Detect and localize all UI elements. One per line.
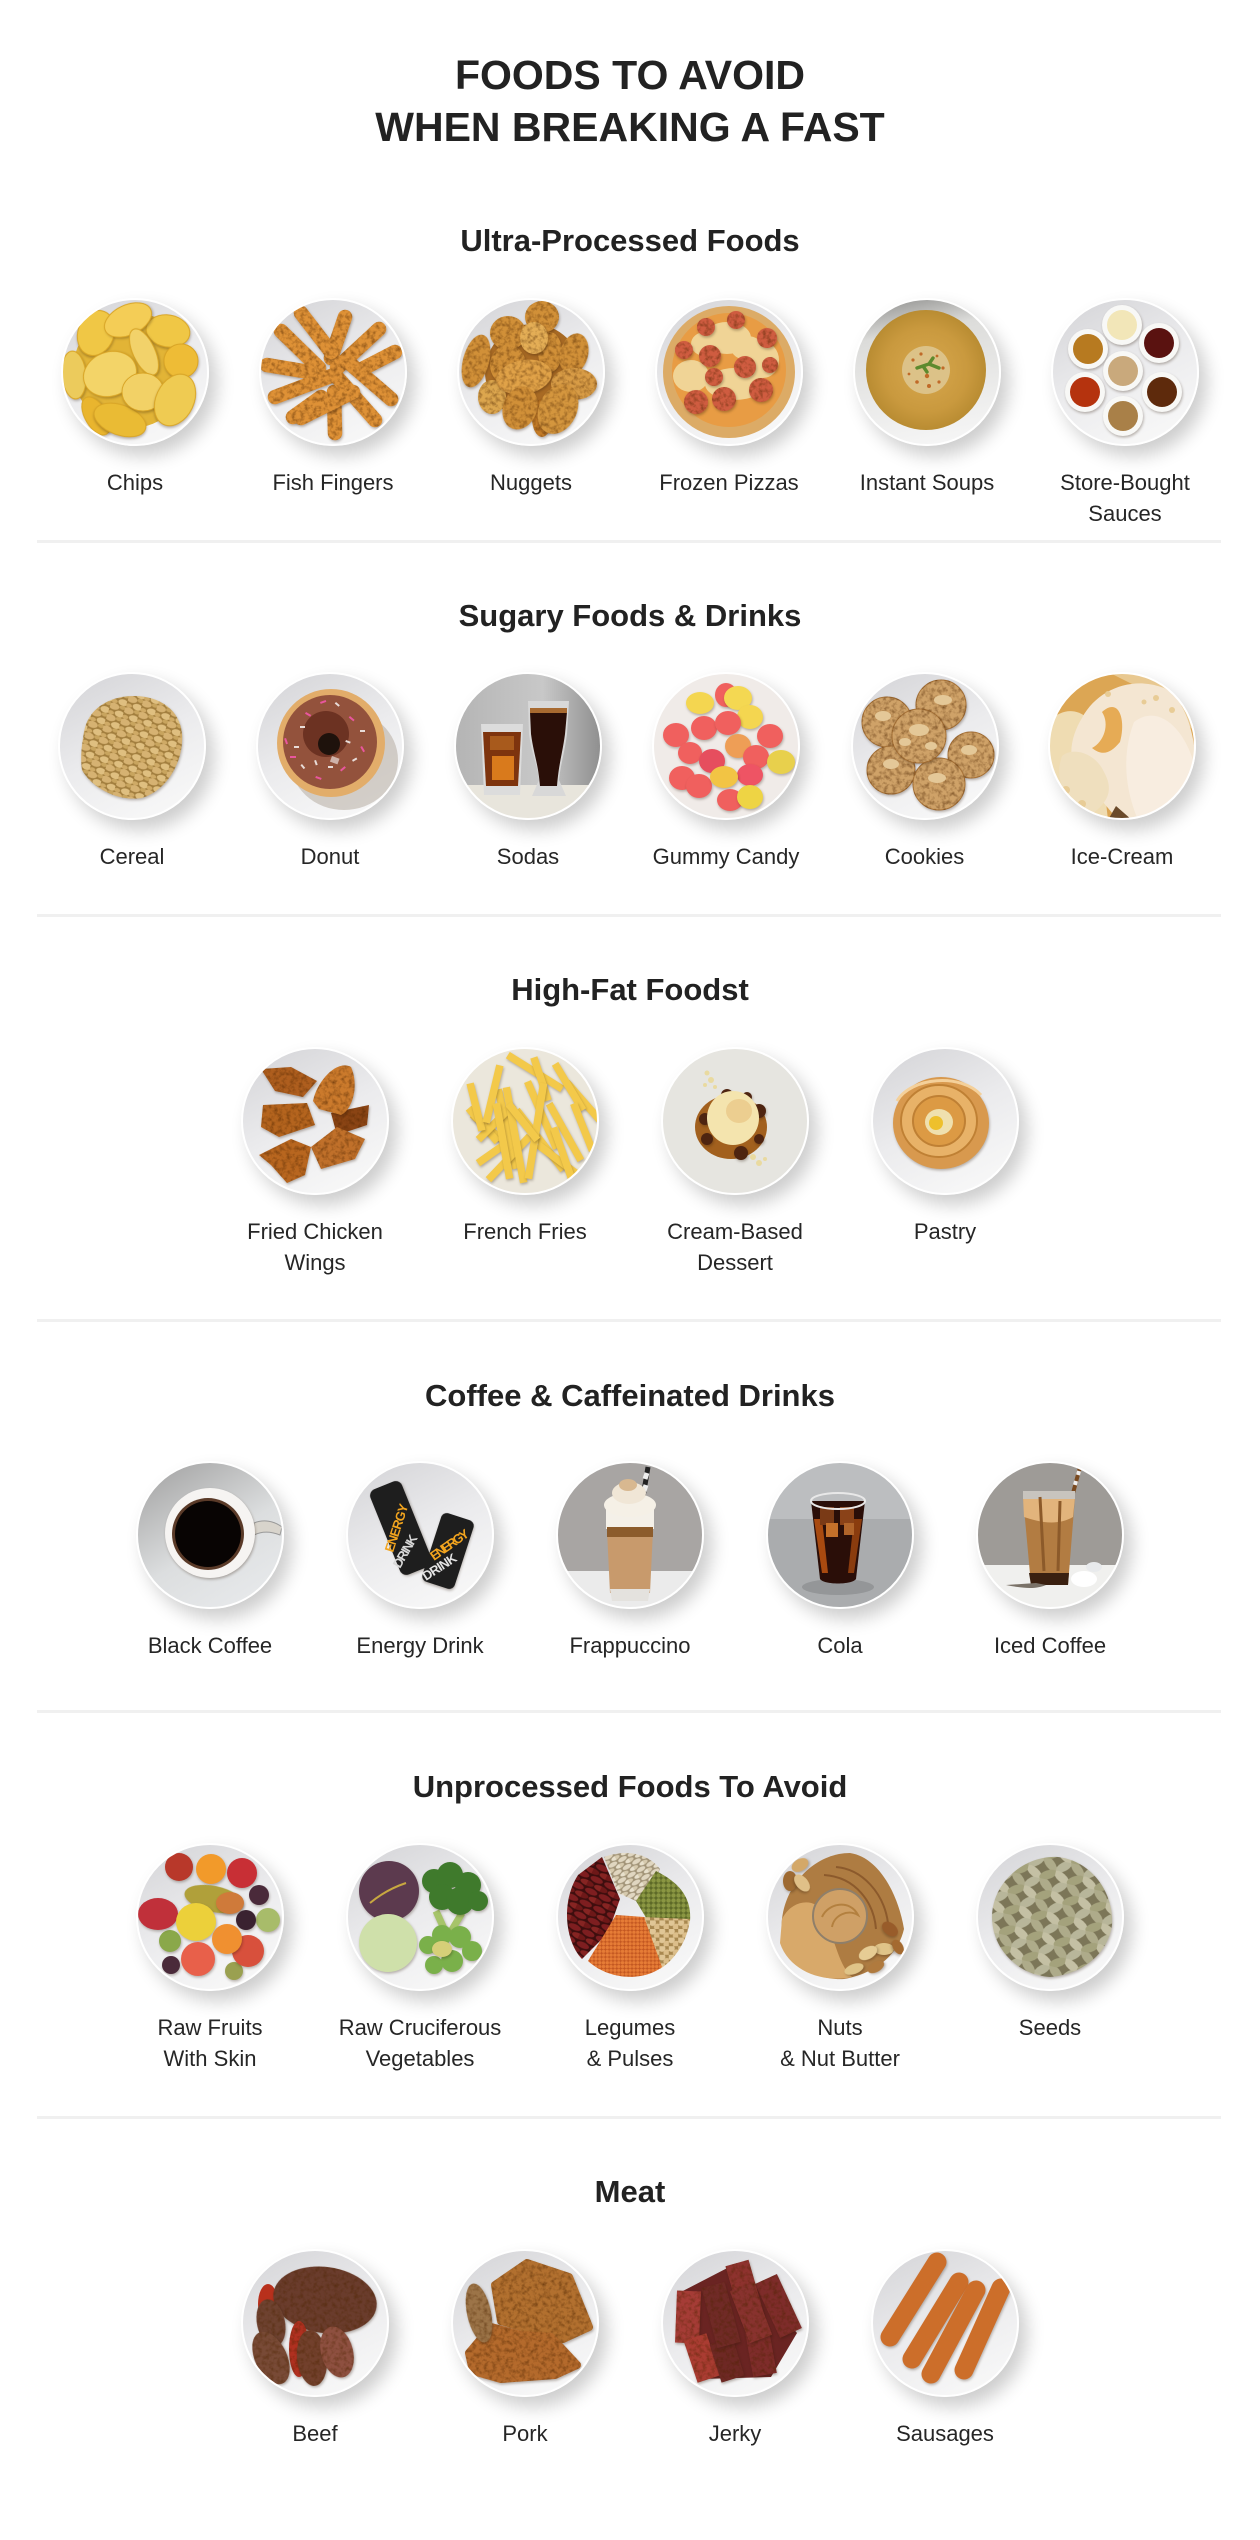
icon: pizza on a plate — [655, 298, 803, 446]
label: Wings — [284, 1250, 346, 1275]
item: frappuccino — [556, 1463, 720, 1658]
label — [780, 2015, 900, 2071]
icon: nuggets on a plate — [457, 298, 605, 446]
label — [247, 1219, 383, 1275]
icon: cream dessert on a plate — [661, 1047, 809, 1195]
label: Nuggets — [490, 470, 572, 494]
icon: sausages on a plate — [871, 2249, 1019, 2397]
item: black coffee — [136, 1463, 300, 1658]
label — [1060, 470, 1190, 526]
item: iced coffee — [976, 1463, 1140, 1658]
label: Cereal — [100, 844, 164, 869]
label: & Nut Butter — [780, 2046, 900, 2071]
label: Sodas — [497, 844, 559, 869]
icon: cereal on a plate — [58, 672, 206, 820]
item: french fries — [451, 1049, 615, 1244]
icon: two energy drink cans: DRINK — [419, 1550, 460, 1584]
item: donut — [256, 674, 420, 869]
label: Vegetables — [366, 2046, 474, 2071]
panel: meat — [241, 2174, 1035, 2446]
icon: cruciferous vegetables on a plate — [346, 1843, 494, 1991]
icon: frappuccino in a glass — [556, 1461, 704, 1609]
item: jerky — [661, 2251, 825, 2446]
icon: glass of cola — [766, 1461, 914, 1609]
icon: pastry on a plate — [871, 1047, 1019, 1195]
label: Black Coffee — [148, 1633, 272, 1658]
label: Chips — [107, 470, 163, 494]
label: Fried Chicken — [247, 1219, 383, 1244]
item: cookies — [851, 674, 1015, 869]
label: French Fries — [463, 1219, 587, 1244]
item: cereal — [58, 674, 222, 869]
label: Cream-Based — [667, 1219, 803, 1244]
heading: coffee and caffeinated drinks: Coffee & Caffeinated Drinks — [425, 1378, 835, 1412]
icon: two energy drink cans: ENERGY — [382, 1501, 411, 1554]
label: Seeds — [1019, 2015, 1081, 2040]
item: nuggets — [457, 300, 621, 494]
icon: fruits on a plate — [136, 1843, 284, 1991]
item: pastry — [871, 1049, 1035, 1244]
label: Frappuccino — [569, 1633, 691, 1658]
heading: sugary foods and drinks: Sugary Foods & Drinks — [459, 598, 801, 633]
label: Raw Fruits — [157, 2015, 263, 2040]
label: Iced Coffee — [994, 1633, 1106, 1658]
label: Dessert — [697, 1250, 773, 1275]
label: Cola — [817, 1633, 863, 1658]
icon: gummy candy on a plate — [652, 672, 800, 820]
icon: french fries on a plate — [451, 1047, 599, 1195]
label: With Skin — [164, 2046, 256, 2071]
icon: two energy drink cans: ENERGY — [427, 1526, 472, 1563]
title — [375, 52, 885, 150]
icon: nut butter and nuts on a plate — [766, 1843, 914, 1991]
item: raw fruits with skin — [136, 1845, 300, 2071]
label: Sauces — [1088, 500, 1162, 526]
icon: ice-cream close-up — [1048, 672, 1196, 820]
item: seeds — [976, 1845, 1140, 2040]
heading: high-fat foods: High-Fat Foodst — [511, 972, 749, 1007]
item: sausages — [871, 2251, 1035, 2446]
icon: cup of black coffee — [136, 1461, 284, 1609]
heading: unprocessed foods to avoid: Unprocessed Foods To Avoid — [413, 1768, 847, 1804]
label: Nuts — [817, 2015, 863, 2040]
item: raw cruciferous vegetables — [339, 1845, 510, 2071]
item: frozen pizzas — [655, 300, 819, 494]
panel: coffee and caffeinated drinks — [136, 1378, 1140, 1658]
label: Sausages — [896, 2421, 994, 2446]
label: Pork — [502, 2421, 548, 2446]
title: WHEN BREAKING A FAST — [375, 104, 885, 150]
item: ice-cream — [1048, 674, 1212, 869]
heading: ultra-processed foods: Ultra-Processed Foods — [460, 223, 800, 258]
item: cola — [766, 1463, 930, 1658]
label: Gummy Candy — [653, 844, 799, 869]
icon: jerky on a plate — [661, 2249, 809, 2397]
item: gummy candy — [652, 674, 816, 869]
item: fried chicken wings — [241, 1049, 405, 1275]
item: sodas — [454, 674, 618, 869]
icon: legumes and pulses on a plate — [556, 1843, 704, 1991]
item: energy drink — [346, 1463, 510, 1658]
label — [157, 2015, 263, 2071]
item: beef — [241, 2251, 405, 2446]
panel: sugary foods and drinks — [58, 598, 1212, 869]
icon: sauce dishes on a plate — [1051, 298, 1199, 446]
label: Pastry — [914, 1219, 976, 1244]
icon: beef on a plate — [241, 2249, 389, 2397]
label: Fish Fingers — [272, 470, 394, 494]
icon: fried chicken wings on a plate — [241, 1047, 389, 1195]
label: & Pulses — [587, 2046, 673, 2071]
icon: pork on a plate — [451, 2249, 599, 2397]
item: legumes and pulses — [556, 1845, 720, 2071]
item: chips — [61, 300, 225, 494]
label: Jerky — [709, 2421, 761, 2446]
item: fish fingers — [259, 300, 423, 494]
item: store-bought sauces — [1051, 300, 1215, 526]
icon: seeds on a plate — [976, 1843, 1124, 1991]
icon: fish fingers on a plate — [259, 298, 407, 446]
label — [667, 1219, 803, 1275]
icon: glazed donut — [256, 672, 404, 820]
panel: unprocessed foods to avoid — [136, 1768, 1140, 2071]
label: Beef — [292, 2421, 338, 2446]
panel: high-fat foods — [241, 972, 1035, 1275]
label — [585, 2015, 675, 2071]
icon: bowl of soup — [853, 298, 1001, 446]
label: Legumes — [585, 2015, 675, 2040]
label: Frozen Pizzas — [659, 470, 799, 494]
label: Store-Bought — [1060, 470, 1190, 494]
item: instant soups — [853, 300, 1017, 494]
title: FOODS TO AVOID — [455, 52, 805, 98]
label: Cookies — [885, 844, 964, 869]
icon: two energy drink cans: DRINK — [390, 1531, 421, 1570]
label — [339, 2015, 501, 2071]
label: Raw Cruciferous — [339, 2015, 501, 2040]
label: Energy Drink — [356, 1633, 484, 1658]
icon: cookies on a plate — [850, 672, 998, 820]
label: Ice-Cream — [1071, 844, 1173, 869]
label: Instant Soups — [860, 470, 994, 494]
item: cream-based dessert — [661, 1049, 825, 1275]
item: pork — [451, 2251, 615, 2446]
icon: glass of iced coffee — [976, 1461, 1124, 1609]
item: nuts and nut butter — [766, 1845, 930, 2071]
heading: meat: Meat — [595, 2174, 665, 2209]
panel: ultra-processed foods — [61, 223, 1215, 526]
icon: chips on a plate — [61, 298, 209, 446]
icon: two energy drink cans — [346, 1461, 494, 1609]
label: Donut — [301, 844, 359, 869]
icon: two glasses of soda — [454, 672, 602, 820]
